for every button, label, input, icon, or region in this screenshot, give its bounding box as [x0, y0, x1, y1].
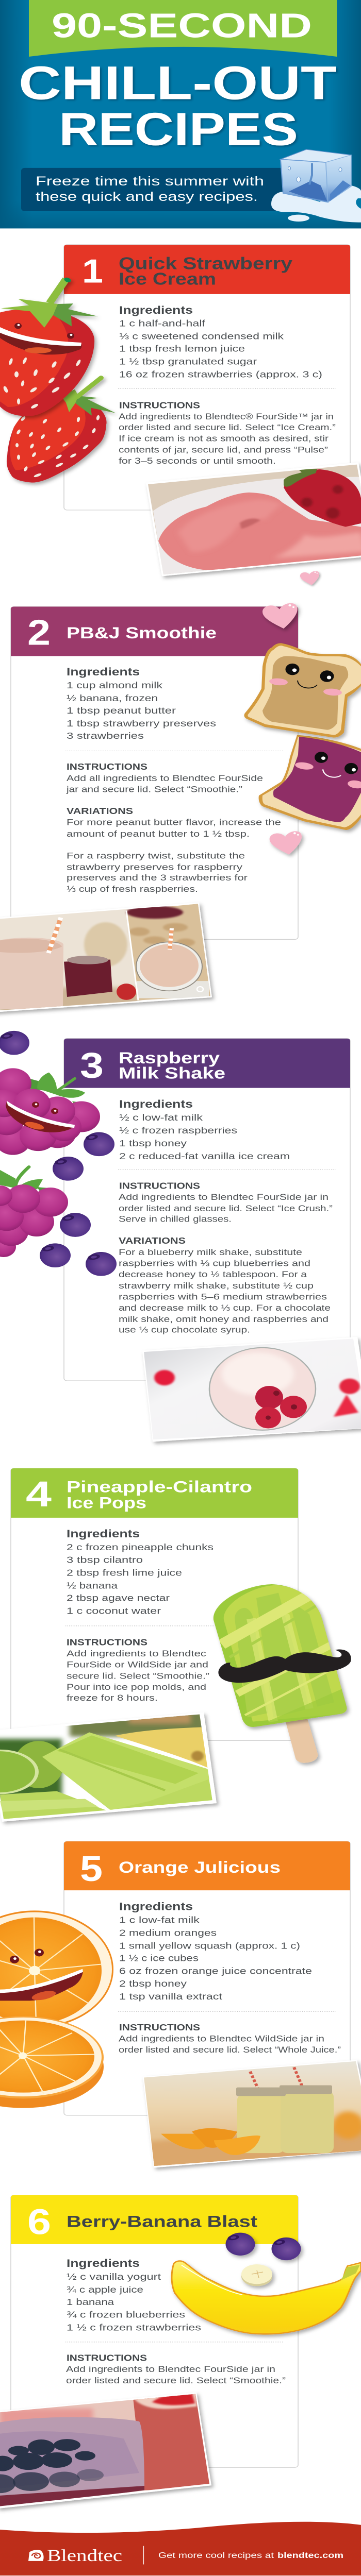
ingredients list 2: 3 strawberries — [67, 732, 144, 741]
panel: recipe 6 berry-banana blast — [11, 2195, 298, 2467]
ingredients list 5: 2 medium oranges — [119, 1928, 217, 1938]
icon: heart — [300, 571, 319, 585]
ingredients list 4: 2 c frozen pineapple chunks — [67, 1543, 214, 1553]
header band 4 — [11, 1468, 298, 1518]
header band 6: Berry-Banana Blast — [67, 2212, 257, 2231]
header band 4: 4 — [26, 1475, 52, 1515]
header band 1: Quick Strawberry — [119, 254, 293, 273]
instructions 1: for 3–5 seconds or until smooth. — [119, 456, 276, 466]
instructions and variations 3: order listed and secure lid. Select “Ice Crush.” — [119, 1204, 333, 1213]
photo: berry smoothies — [0, 2392, 217, 2512]
icon: hearts — [262, 603, 302, 855]
ingredients list 4 — [67, 1528, 214, 1616]
panel: recipe 4 pineapple-cilantro ice pops — [11, 1468, 298, 1740]
instructions and variations 3: and decrease milk to ⅓ cup. For a chocolate — [119, 1303, 331, 1313]
photo: strawberry ice cream — [144, 462, 361, 578]
green banner: 90-second: 90-SECOND — [52, 6, 312, 45]
instructions 1: Add ingredients to Blendtec® FourSide™ jar in — [119, 412, 334, 421]
header band 1 — [64, 245, 350, 294]
call to action: blendtec.com — [277, 2551, 343, 2560]
instructions and variations 2: strawberry preserves for raspberry — [67, 862, 242, 872]
ingredients list 5: 1 tsp vanilla extract — [119, 1992, 223, 2002]
panel: recipe 5 orange julicious — [64, 1841, 350, 2115]
ingredients list 2: 1 tbsp strawberry preserves — [67, 719, 216, 729]
ingredients list 3: 1 tbsp honey — [119, 1139, 187, 1149]
instructions 1: order listed and secure lid. Select “Ice Cream.” — [119, 423, 336, 432]
title: chill-out recipes: RECIPES — [59, 104, 298, 156]
ingredients list 5: 2 tbsp honey — [119, 1979, 187, 1989]
header band 2: 2 — [27, 613, 51, 653]
panel: recipe 1 quick strawberry ice cream — [64, 245, 350, 510]
instructions and variations 3 — [119, 1181, 333, 1334]
instructions 4 — [67, 1638, 209, 1702]
instructions 4: FourSide or WildSide jar and — [67, 1660, 208, 1669]
ingredients list 5 — [119, 1900, 312, 2002]
instructions and variations 2: jar and secure lid. Select “Smoothie.” — [66, 785, 242, 794]
panel: recipe 2 pb&j smoothie — [11, 607, 298, 939]
header panel — [0, 0, 361, 228]
header band 2 — [11, 607, 298, 656]
ingredients list 5: 6 oz frozen orange juice concentrate — [119, 1967, 312, 1976]
header band 5: Orange Julicious — [119, 1858, 281, 1876]
instructions and variations 2: Add all ingredients to Blendtec FourSide — [67, 773, 263, 783]
green banner: 90-second — [29, 0, 337, 57]
instructions and variations 2 — [66, 762, 281, 893]
title: chill-out recipes — [19, 57, 337, 156]
ingredients list 2: ½ banana, frozen — [67, 693, 158, 703]
ingredients list 6: Ingredients — [67, 2257, 140, 2269]
intro callout: Freeze time this summer with — [36, 174, 264, 188]
header band 1: 1 — [82, 252, 103, 290]
ingredients list 4: 1 c coconut water — [67, 1606, 161, 1616]
instructions and variations 2: VARIATIONS — [67, 807, 133, 817]
intro callout — [21, 168, 294, 211]
ingredients list 1: 1 c half-and-half — [119, 319, 206, 329]
ingredients list 1: 1 tbsp fresh lemon juice — [119, 344, 245, 354]
instructions and variations 3: For a blueberry milk shake, substitute — [119, 1247, 302, 1257]
ingredients list 2 — [67, 666, 216, 741]
header band 6 — [11, 2195, 298, 2244]
ingredients list 1: 16 oz frozen strawberries (approx. 3 c) — [119, 370, 322, 380]
icon: orange slice with face — [0, 1910, 113, 2028]
instructions and variations 3: decrease honey to ½ tablespoon. For a — [119, 1270, 307, 1279]
ingredients list 6 — [67, 2257, 201, 2333]
instructions and variations 3: Add ingredients to Blendtec FourSide jar in — [119, 1193, 329, 1202]
photo: raspberry milk shake — [139, 1335, 361, 1443]
instructions 1: INSTRUCTIONS — [119, 401, 200, 411]
instructions and variations 2: For a raspberry twist, substitute the — [67, 851, 245, 860]
instructions and variations 3: Serve in chilled glasses. — [119, 1214, 232, 1224]
photo: ice pops — [0, 1711, 222, 1825]
instructions 4: freeze for 8 hours. — [67, 1693, 158, 1702]
icon: orange slice — [0, 2016, 104, 2108]
header band 5: 5 — [80, 1849, 103, 1889]
ingredients list 4: 3 tbsp cilantro — [67, 1555, 143, 1565]
icon: ice pop with moustache — [214, 1584, 351, 1763]
stick — [286, 1719, 318, 1763]
photo: pb&j smoothie — [0, 902, 212, 1013]
call to action: Get more cool recipes at — [158, 2551, 274, 2560]
ingredients list 5: Ingredients — [119, 1900, 193, 1913]
header band 3 — [64, 1039, 350, 1088]
ingredients list 6: ¾ c frozen blueberries — [67, 2310, 185, 2320]
instructions and variations 3: INSTRUCTIONS — [119, 1181, 200, 1191]
ingredients list 2: 1 cup almond milk — [67, 681, 162, 690]
instructions 5 — [119, 2023, 341, 2055]
call to action — [158, 2551, 343, 2560]
instructions 6: order listed and secure lid. Select “Smoothie.” — [66, 2376, 286, 2385]
icon: blueberries and banana slice — [226, 2233, 301, 2286]
instructions 1: contents of jar, secure lid, and press “Pulse” — [119, 445, 328, 454]
ingredients list 1: ⅓ c sweetened condensed milk — [119, 332, 284, 342]
icon: banana smile — [172, 2261, 361, 2334]
moustache — [218, 1650, 351, 1683]
instructions and variations 2: preserves and the 3 strawberries for — [67, 873, 248, 883]
instructions 6: INSTRUCTIONS — [67, 2353, 147, 2363]
header band 2: PB&J Smoothie — [67, 624, 217, 642]
instructions 6: Add ingredients to Blendtec FourSide jar in — [66, 2365, 275, 2374]
upper strawberry with face — [0, 277, 98, 416]
icon: strawberry characters — [0, 277, 116, 483]
ingredients list 5: 1 small yellow squash (approx. 1 c) — [119, 1941, 300, 1951]
instructions 5: order listed and secure lid. Select “Whole Juice.” — [119, 2045, 341, 2055]
ingredients list 4: Ingredients — [67, 1528, 140, 1540]
icon: blueberries — [0, 1031, 117, 1276]
instructions and variations 2: ⅓ cup of fresh raspberries. — [67, 884, 198, 893]
header band 4: Ice Pops — [67, 1494, 146, 1512]
instructions 5: INSTRUCTIONS — [119, 2023, 200, 2032]
ingredients list 5: 1 ½ c ice cubes — [119, 1954, 199, 1963]
header band 3: 3 — [80, 1045, 104, 1086]
instructions and variations 2: For more peanut butter flavor, increase the — [67, 818, 281, 827]
ingredients list 1 — [119, 304, 322, 380]
ingredients list 5: 1 c low-fat milk — [119, 1916, 200, 1925]
ingredients list 6: 1 banana — [67, 2298, 114, 2308]
instructions 1 — [119, 401, 336, 466]
header band 3: Milk Shake — [119, 1064, 225, 1082]
instructions 4: secure lid. Select “Smoothie.” — [67, 1671, 209, 1681]
ingredients list 2: Ingredients — [67, 666, 140, 678]
icon: lower raspberry bunch — [0, 1167, 68, 1257]
instructions and variations 2: amount of peanut butter to 1 ½ tbsp. — [67, 829, 250, 839]
ingredients list 3: ½ c low-fat milk — [119, 1113, 203, 1123]
ingredients list 6: ¾ c apple juice — [67, 2285, 143, 2295]
pop body — [214, 1584, 351, 1730]
ingredients list 1: Ingredients — [119, 304, 193, 317]
logo: blendtec: Blendtec — [47, 2546, 122, 2565]
instructions and variations 3: strawberry milk shake, substitute ½ cup — [119, 1281, 314, 1290]
instructions and variations 3: use ⅓ cup chocolate syrup. — [119, 1325, 250, 1334]
instructions and variations 3: raspberries with 5–6 medium strawberries — [119, 1292, 327, 1301]
ingredients list 3: 2 c reduced-fat vanilla ice cream — [119, 1152, 290, 1162]
ingredients list 3: ½ c frozen raspberries — [119, 1126, 237, 1136]
header band 3: Raspberry — [119, 1049, 220, 1067]
ingredients list 4: 2 tbsp agave nectar — [67, 1594, 170, 1603]
icon: melting ice cube — [271, 149, 361, 223]
instructions 1: If ice cream is not as smooth as desired, stir — [119, 434, 329, 443]
instructions 5: Add ingredients to Blendtec WildSide jar in — [119, 2034, 324, 2043]
ingredients list 1: 1 ½ tbsp granulated sugar — [119, 357, 257, 367]
header band 5 — [64, 1841, 350, 1890]
photo: orange smoothie jars — [139, 2057, 361, 2173]
ingredients list 2: 1 tbsp peanut butter — [67, 706, 176, 716]
header band 4: Pineapple-Cilantro — [67, 1478, 252, 1496]
instructions 4: Pour into ice pop molds, and — [67, 1683, 206, 1692]
ingredients list 6: 1 ½ c frozen strawberries — [67, 2323, 201, 2333]
instructions 6 — [66, 2353, 286, 2385]
ingredients list 6: ½ c vanilla yogurt — [67, 2273, 161, 2282]
instructions and variations 3: raspberries with ⅓ cup blueberries and — [119, 1259, 310, 1268]
instructions 4: Add ingredients to Blendtec — [67, 1649, 206, 1658]
header band 1: Ice Cream — [119, 269, 216, 289]
footer band — [0, 2522, 361, 2575]
icon: upper raspberry bunch with face — [0, 1068, 100, 1155]
lower strawberry — [7, 378, 116, 483]
ingredients list 4: 2 tbsp fresh lime juice — [67, 1568, 182, 1578]
instructions and variations 2: INSTRUCTIONS — [67, 762, 147, 772]
panel: recipe 3 raspberry milk shake — [64, 1039, 350, 1381]
icon: peanut butter toast — [244, 643, 361, 738]
instructions and variations 3: VARIATIONS — [119, 1236, 186, 1246]
title: chill-out recipes: CHILL-OUT — [19, 57, 337, 109]
ingredients list 4: ½ banana — [67, 1581, 118, 1591]
intro callout: these quick and easy recipes. — [36, 189, 258, 204]
instructions and variations 3: milk shake, omit honey and raspberries and — [119, 1314, 329, 1324]
ingredients list 3: Ingredients — [119, 1098, 193, 1110]
instructions 4: INSTRUCTIONS — [67, 1638, 147, 1648]
header band 6: 6 — [27, 2202, 51, 2242]
ingredients list 3 — [119, 1098, 290, 1162]
icon: jelly toast — [259, 735, 361, 830]
